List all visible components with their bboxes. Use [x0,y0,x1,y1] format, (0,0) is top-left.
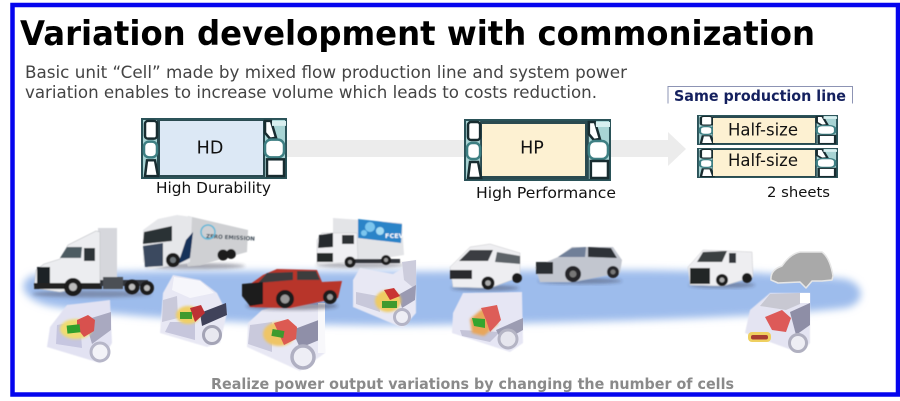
cutaway 4 [353,260,416,328]
label: High Performance: High Performance [476,184,616,202]
cell plate: HD [141,118,287,179]
van white minibus [450,244,522,291]
cell plate: HP: HP [520,138,544,158]
description text [25,63,627,102]
pickup truck red [242,269,342,310]
cell plate: HP [464,119,611,181]
van white delivery [688,250,755,288]
cutaway 1 [47,300,112,363]
light truck FCEV [316,218,404,268]
blue power-range band [23,270,861,325]
cutaway 3 [247,303,325,371]
SUV silver [535,247,622,284]
heavy truck white tractor [32,228,154,298]
description text: Basic unit “Cell” made by mixed flow production line and system power [25,63,627,82]
heavy truck zero emission box [143,215,255,269]
half-size cell 2: Half-size [728,151,798,170]
light truck FCEV: FCEV [385,232,404,240]
description text: variation enables to increase volume which leads to costs reduction. [25,83,597,102]
label: 2 sheets: 2 sheets [767,185,830,201]
half-size cell 2 [697,148,838,178]
bottom caption: Realize power output variations by changing the number of cells [211,375,734,393]
arrow: HD to half-size progression [287,132,686,166]
half-size cell 1: Half-size [728,120,798,140]
cutaway 6 [745,293,810,353]
same production line box: Same production line [674,87,846,105]
label: High Durability: High Durability [156,179,271,197]
cutaway 2 [160,275,227,347]
cutaway 5 [452,292,523,352]
title: Variation development with commonization [20,14,815,54]
heavy truck zero emission box: ZERO EMISSION [206,234,255,243]
cell plate: HD: HD [197,138,223,158]
half-size cell 1 [697,115,838,145]
grey placeholder car silhouette [771,252,833,288]
